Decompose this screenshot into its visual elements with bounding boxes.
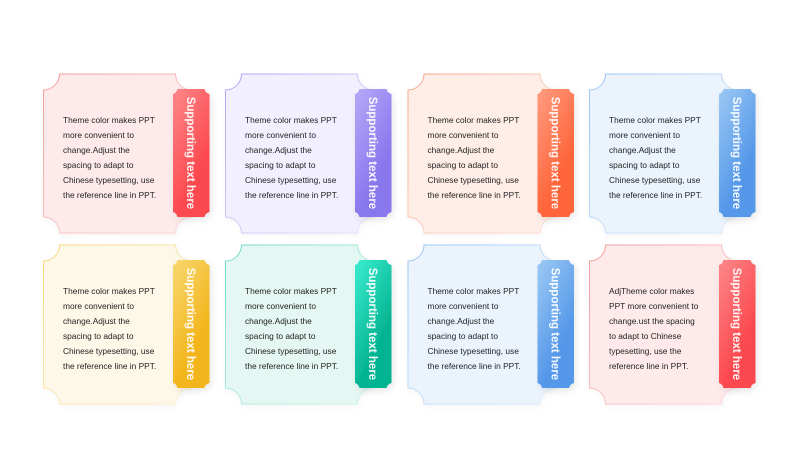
- tab: supporting text: Supporting text here: [730, 268, 744, 381]
- panel: orange card body: [408, 74, 556, 233]
- text block: more convenient to: [609, 130, 680, 140]
- text block: Chinese typesetting, use: [245, 346, 337, 356]
- text block: change.Adjust the: [63, 316, 130, 326]
- panel: blue card body: [590, 74, 738, 233]
- text block: reference line in PPT.: [609, 361, 688, 371]
- text block: typesetting, use the: [609, 346, 682, 356]
- text block: the reference line in PPT.: [245, 361, 338, 371]
- card 8: red: [590, 245, 756, 404]
- text block: more convenient to: [428, 301, 499, 311]
- text block: spacing to adapt to: [428, 160, 498, 170]
- tab: supporting text: [538, 89, 574, 217]
- text block: Theme color makes PPT: [63, 286, 155, 296]
- text block: spacing to adapt to: [245, 160, 316, 170]
- card 2: purple: [226, 74, 392, 233]
- text block: the reference line in PPT.: [609, 190, 702, 200]
- text block: AdjTheme color makes: [609, 286, 694, 296]
- text block: to adapt to Chinese: [609, 331, 682, 341]
- text block: the reference line in PPT.: [428, 190, 521, 200]
- text block: Theme color makes PPT: [63, 115, 155, 125]
- text block: more convenient to: [63, 130, 134, 140]
- tab: supporting text: [355, 89, 392, 217]
- tab: supporting text: Supporting text here: [184, 97, 198, 210]
- text block: change.Adjust the: [245, 145, 312, 155]
- tab: supporting text: Supporting text here: [366, 268, 380, 381]
- tab: supporting text: Supporting text here: [730, 97, 744, 210]
- card 5: yellow: [44, 245, 210, 404]
- text block: the reference line in PPT.: [63, 361, 156, 371]
- text block: Chinese typesetting, use: [428, 346, 519, 356]
- text block: the reference line in PPT.: [63, 190, 156, 200]
- tab: supporting text: [719, 89, 756, 217]
- text block: Chinese typesetting, use: [63, 346, 155, 356]
- panel: red card body: [44, 74, 192, 233]
- text block: spacing to adapt to: [63, 331, 134, 341]
- text block: spacing to adapt to: [63, 160, 134, 170]
- text block: change.ust the spacing: [609, 316, 695, 326]
- text block: Theme color makes PPT: [245, 286, 337, 296]
- text block: more convenient to: [245, 130, 316, 140]
- tab: supporting text: Supporting text here: [548, 268, 562, 381]
- text block: change.Adjust the: [609, 145, 676, 155]
- text block: Chinese typesetting, use: [609, 175, 701, 185]
- card 4: blue: [590, 74, 756, 233]
- tab: supporting text: [173, 260, 210, 388]
- panel: purple card body: [226, 74, 374, 233]
- text block: spacing to adapt to: [428, 331, 498, 341]
- text block: Chinese typesetting, use: [428, 175, 519, 185]
- tab: supporting text: [173, 89, 210, 217]
- text block: spacing to adapt to: [245, 331, 316, 341]
- text block: Theme color makes PPT: [245, 115, 337, 125]
- text block: Theme color makes PPT: [609, 115, 701, 125]
- text block: spacing to adapt to: [609, 160, 680, 170]
- text block: Chinese typesetting, use: [63, 175, 155, 185]
- panel: blue card body: [408, 245, 556, 404]
- text block: change.Adjust the: [428, 316, 495, 326]
- text block: more convenient to: [428, 130, 499, 140]
- card 1: red: [44, 74, 210, 233]
- text block: change.Adjust the: [245, 316, 312, 326]
- tab: supporting text: Supporting text here: [366, 97, 380, 210]
- text block: Chinese typesetting, use: [245, 175, 337, 185]
- text block: the reference line in PPT.: [428, 361, 521, 371]
- text block: the reference line in PPT.: [245, 190, 338, 200]
- text block: Theme color makes PPT: [428, 286, 519, 296]
- tab: supporting text: [719, 260, 756, 388]
- text block: more convenient to: [63, 301, 134, 311]
- card 3: orange: [408, 74, 574, 233]
- panel: yellow card body: [44, 245, 192, 404]
- text block: PPT more convenient to: [609, 301, 699, 311]
- panel: red card body: [590, 245, 738, 404]
- tab: supporting text: Supporting text here: [184, 268, 198, 381]
- card 6: green: [226, 245, 392, 404]
- panel: green card body: [226, 245, 374, 404]
- text block: change.Adjust the: [63, 145, 130, 155]
- tab: supporting text: [355, 260, 392, 388]
- card 7: blue: [408, 245, 574, 404]
- tab: supporting text: [538, 260, 574, 388]
- text block: change.Adjust the: [428, 145, 495, 155]
- tab: supporting text: Supporting text here: [548, 97, 562, 210]
- text block: more convenient to: [245, 301, 316, 311]
- text block: Theme color makes PPT: [428, 115, 519, 125]
